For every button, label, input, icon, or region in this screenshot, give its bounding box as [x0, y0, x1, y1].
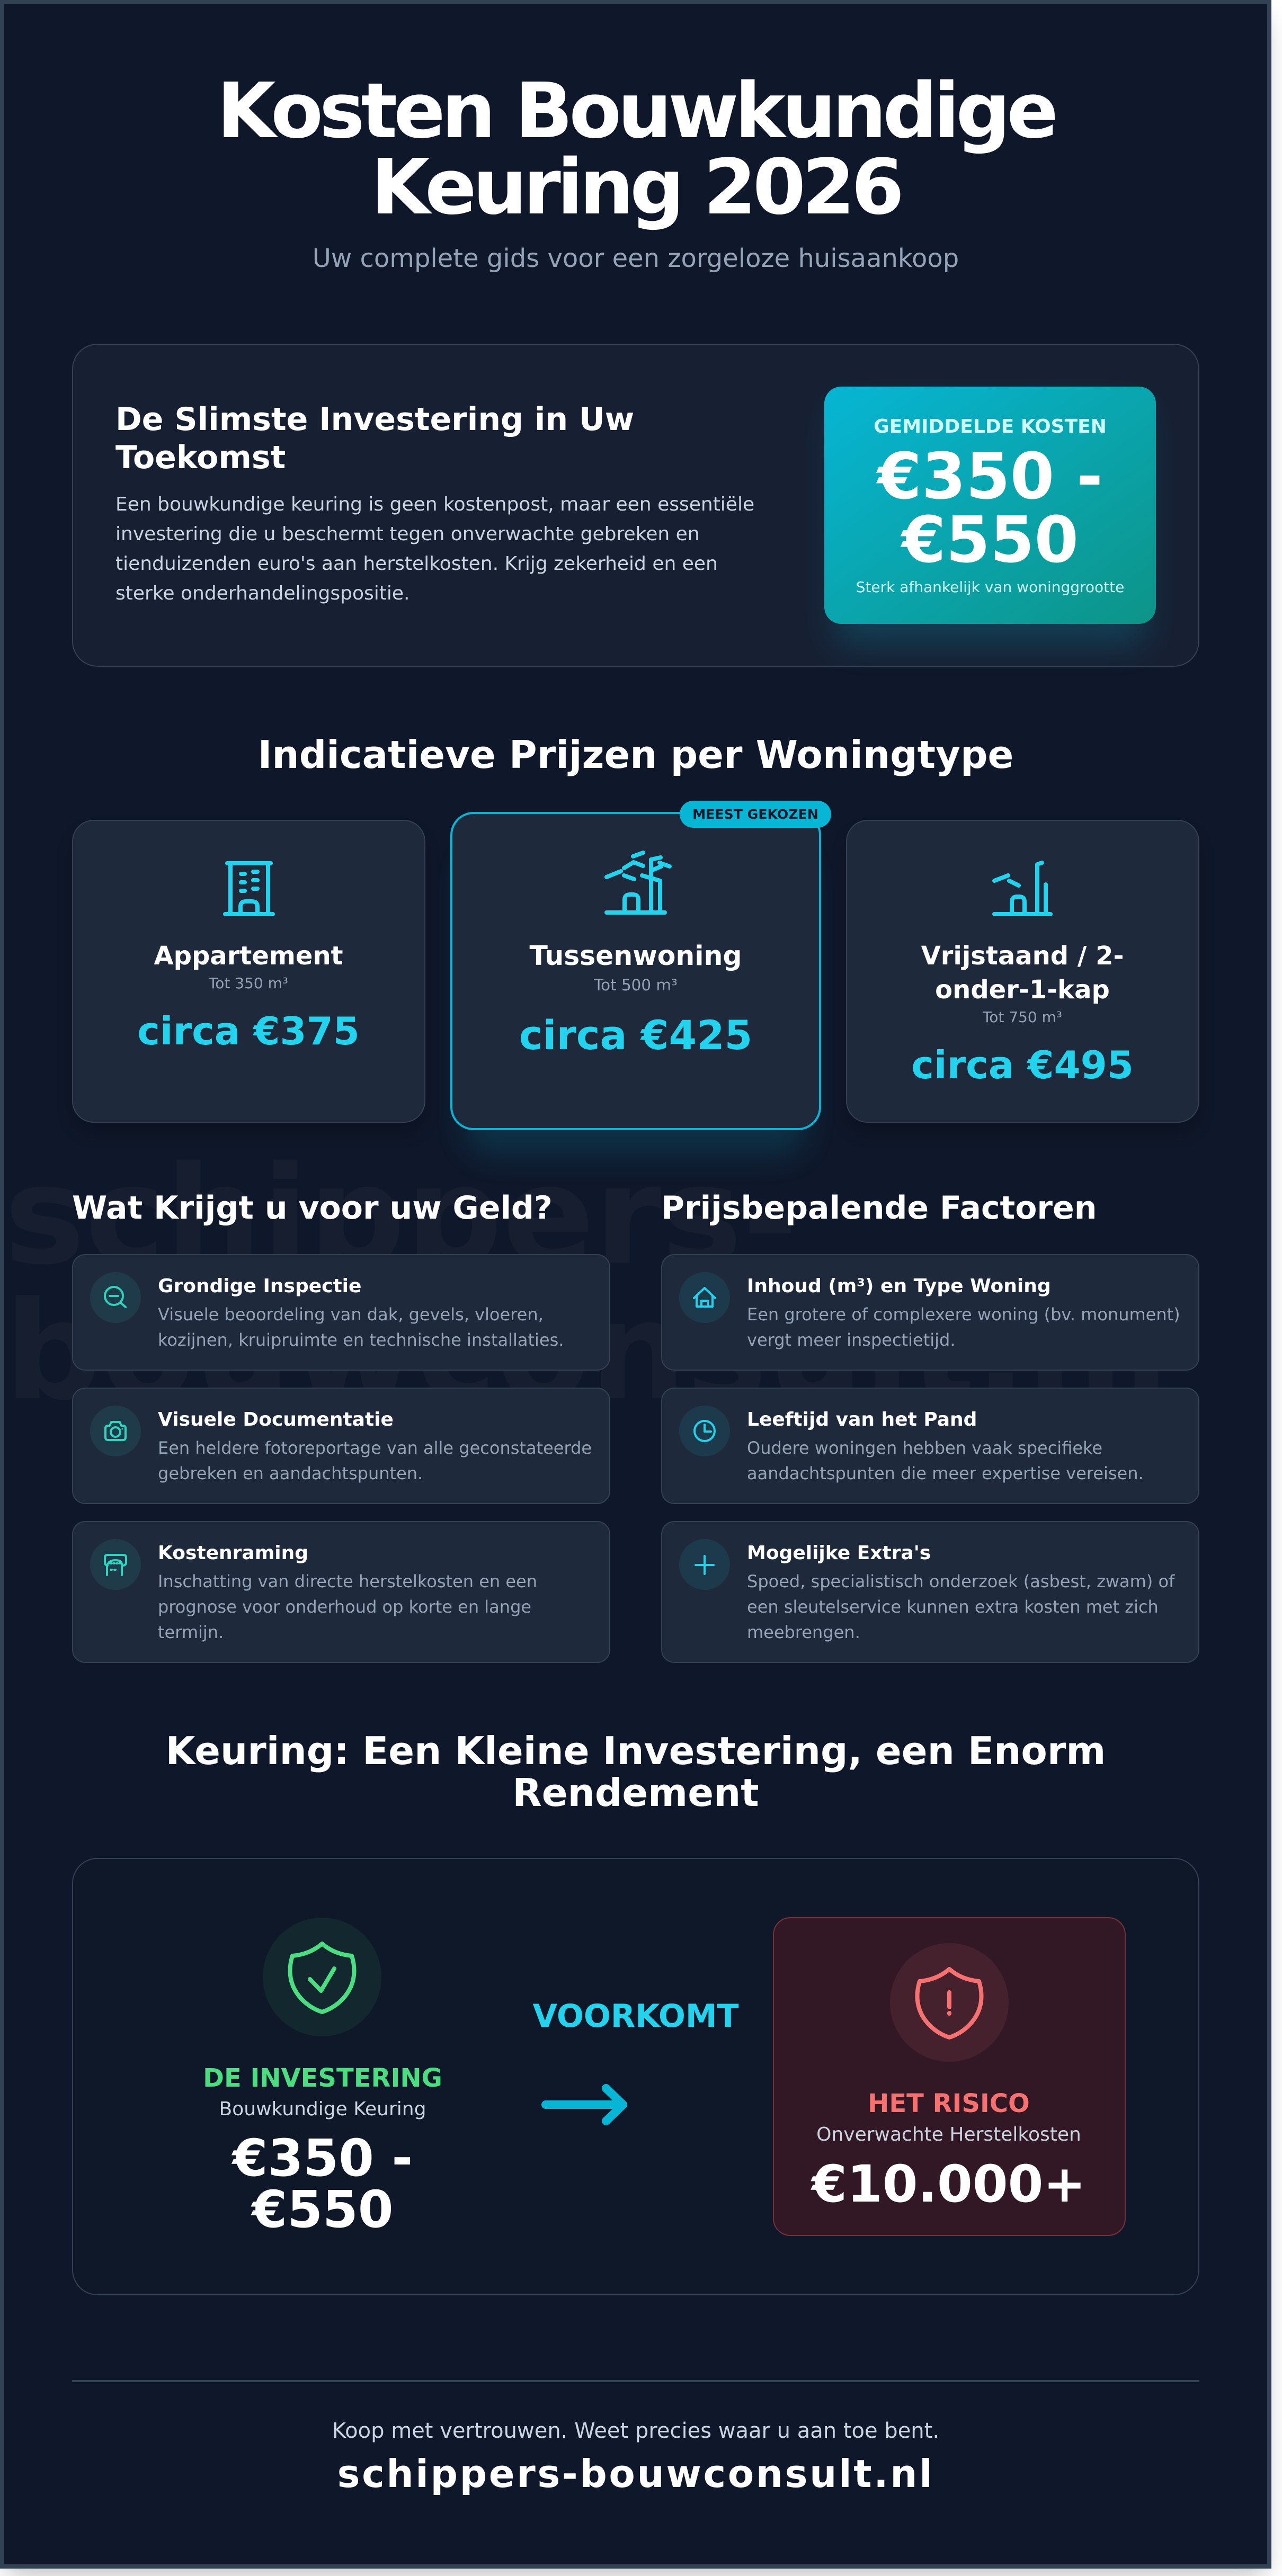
item: Extra's: meebrengen.: [747, 1622, 860, 1642]
price card: Tussenwoning (featured): Tussenwoning: [529, 940, 742, 971]
item: Grondige Inspectie: Visuele beoordeling van dak, gevels, vloeren,: [158, 1304, 544, 1325]
intro heading: [115, 401, 634, 476]
investment side: DE INVESTERING: [203, 2063, 442, 2093]
price card: Tussenwoning (featured): [451, 801, 831, 1155]
panel: comparison: [73, 1858, 1199, 2295]
item: Inhoud: Inhoud (m³) en Type Woning: [747, 1275, 1051, 1297]
item: Visuele Documentatie: gebreken en aandachtspunten.: [158, 1463, 423, 1483]
item: Grondige Inspectie: Grondige Inspectie: [158, 1275, 361, 1297]
section heading: prices: Indicatieve Prijzen per Woningtype: [258, 732, 1013, 777]
item: Leeftijd: Oudere woningen hebben vaak specifieke: [747, 1438, 1102, 1458]
arrow: [546, 2088, 623, 2121]
item: Visuele Documentatie: Een heldere fotoreportage van alle geconstateerde: [158, 1438, 592, 1458]
item: Grondige Inspectie: kozijnen, kruipruimte en technische installaties.: [158, 1330, 564, 1350]
icon: shield check: [290, 1944, 354, 2012]
item: Leeftijd: aandachtspunten die meer expertise vereisen.: [747, 1463, 1144, 1483]
price card: Vrijstaand: Vrijstaand / 2-: [921, 941, 1124, 971]
item: Kostenraming: prognose voor onderhoud op korte en lange: [158, 1597, 531, 1617]
item: Visuele Documentatie: Visuele Documentatie: [158, 1409, 394, 1430]
intro paragraph: investering die u beschermt tegen onverwachte gebreken en: [115, 523, 700, 545]
intro heading: Toekomst: [115, 439, 286, 476]
watermark: schippers-: [4, 1137, 798, 1295]
investment side: Bouwkundige Keuring: [219, 2098, 426, 2120]
item: Kostenraming: [73, 1522, 610, 1662]
watermark: bouwconsult.nl: [4, 1273, 1170, 1430]
icon: shield alert: [918, 1969, 981, 2037]
section heading: return: Keuring: Een Kleine Investering, een Enorm: [166, 1729, 1106, 1773]
item: Inhoud: [662, 1255, 1199, 1370]
item: Extra's: Spoed, specialistisch onderzoek (asbest, zwam) of: [747, 1571, 1175, 1591]
badge: [680, 801, 831, 828]
cost box: Sterk afhankelijk van woninggrootte: [856, 578, 1124, 596]
title: Keuring 2026: [371, 142, 901, 231]
section heading: return: [166, 1729, 1106, 1815]
item: Grondige Inspectie: [73, 1255, 610, 1370]
title: [217, 66, 1055, 231]
watermark: [4, 1137, 1170, 1430]
prevents label: VOORKOMT: [532, 1998, 739, 2035]
price card: Appartement: Appartement: [154, 941, 343, 971]
price card: Tussenwoning (featured): circa €425: [519, 1012, 752, 1059]
item: Leeftijd: Leeftijd van het Pand: [747, 1409, 977, 1430]
price card: Vrijstaand: [847, 820, 1199, 1133]
item: Leeftijd: [662, 1388, 1199, 1504]
intro paragraph: tienduizenden euro's aan herstelkosten. Krijg zekerheid en een: [115, 553, 718, 575]
icon: terraced house: [607, 853, 670, 913]
intro paragraph: Een bouwkundige keuring is geen kostenpost, maar een essentiële: [115, 494, 754, 515]
cost box: €350 -: [876, 440, 1103, 514]
icon: detached house: [994, 863, 1050, 914]
risk side: [773, 1918, 1125, 2235]
item: Extra's: Mogelijke Extra's: [747, 1542, 931, 1564]
icon: building: [225, 863, 273, 914]
cost box: [824, 387, 1156, 645]
investment side: [203, 1918, 442, 2239]
item: Extra's: een sleutelservice kunnen extra kosten met zich: [747, 1597, 1159, 1617]
column: price factors: [661, 1189, 1199, 1662]
price card: Vrijstaand: Tot 750 m³: [982, 1008, 1062, 1026]
footer: schippers-bouwconsult.nl: [337, 2452, 934, 2496]
item: Inhoud: vergt meer inspectietijd.: [747, 1330, 956, 1350]
subtitle: Uw complete gids voor een zorgeloze huisaankoop: [313, 244, 959, 273]
intro heading: De Slimste Investering in Uw: [115, 401, 634, 438]
risk side: HET RISICO: [868, 2089, 1030, 2118]
column: what you get: [72, 1189, 610, 1662]
price card: Vrijstaand: onder-1-kap: [935, 975, 1110, 1005]
price card: Appartement: circa €375: [137, 1009, 360, 1053]
badge: MEEST GEKOZEN: [692, 807, 818, 822]
item: Extra's: [662, 1522, 1199, 1662]
price card: Vrijstaand: circa €495: [911, 1043, 1134, 1087]
investment side: €350 -: [232, 2128, 413, 2188]
cost box: €550: [900, 504, 1079, 577]
item: Kostenraming: Inschatting van directe herstelkosten en een: [158, 1571, 537, 1591]
intro paragraph: [115, 494, 754, 604]
cost box: GEMIDDELDE KOSTEN: [874, 416, 1107, 437]
investment side: €550: [251, 2180, 394, 2239]
heading: Wat Krijgt u voor uw Geld?: [72, 1189, 553, 1227]
footer: Koop met vertrouwen. Weet precies waar u aan toe bent.: [332, 2419, 939, 2443]
price card: Tussenwoning (featured): Tot 500 m³: [593, 976, 678, 994]
risk side: Onverwachte Herstelkosten: [816, 2124, 1081, 2145]
item: Kostenraming: termijn.: [158, 1622, 224, 1642]
price card: Appartement: Tot 350 m³: [208, 974, 288, 992]
item: Visuele Documentatie: [73, 1388, 610, 1504]
heading: Prijsbepalende Factoren: [661, 1189, 1097, 1227]
footer: [72, 2380, 1199, 2496]
item: Kostenraming: Kostenraming: [158, 1542, 308, 1564]
intro paragraph: sterke onderhandelingspositie.: [115, 583, 409, 604]
section heading: return: Rendement: [512, 1770, 759, 1815]
item: Inhoud: Een grotere of complexere woning (bv. monument): [747, 1304, 1180, 1325]
risk side: €10.000+: [811, 2154, 1086, 2214]
panel: intro: [73, 344, 1199, 666]
price card: Appartement: [73, 820, 425, 1133]
title: Kosten Bouwkundige: [217, 66, 1055, 155]
